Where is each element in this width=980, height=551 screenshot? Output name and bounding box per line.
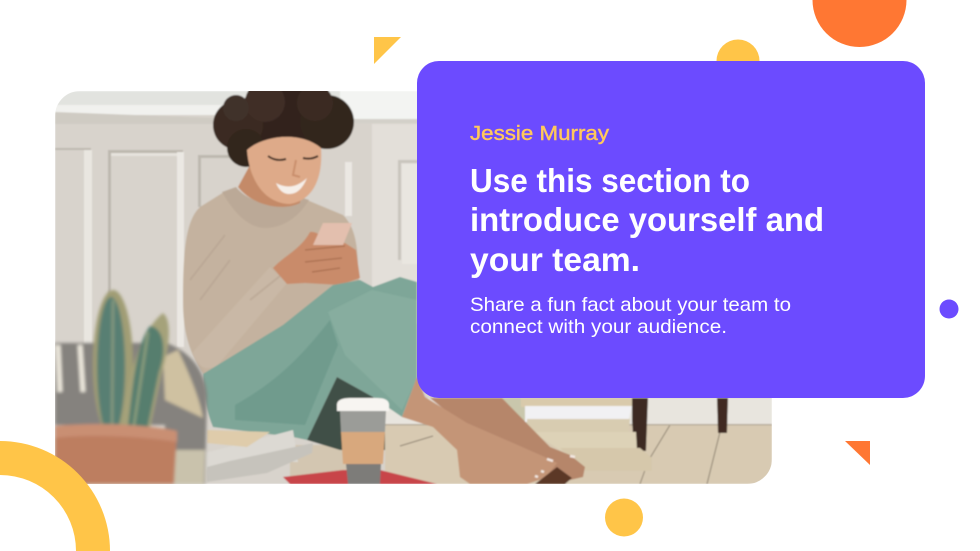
heading: your team. <box>470 241 640 278</box>
panel: purple intro card <box>417 61 925 398</box>
takeaway cup <box>340 411 386 432</box>
red notebook <box>283 470 437 484</box>
decoration: purple dot <box>940 300 958 318</box>
blurred foreground: blanket and cactus <box>55 290 207 484</box>
magazines <box>275 429 298 462</box>
body text: Share a fun fact about your team to <box>470 294 791 316</box>
body text: connect with your audience. <box>470 316 727 338</box>
cactus stems <box>97 297 125 437</box>
face <box>247 137 321 204</box>
phone and hands <box>273 232 360 285</box>
terracotta pot <box>55 434 178 484</box>
wall between legs and books <box>502 398 528 424</box>
heading <box>470 162 824 278</box>
decoration: yellow triangle <box>374 37 401 64</box>
heading: Use this section to <box>470 162 750 199</box>
body text <box>470 294 791 338</box>
heading: introduce yourself and <box>470 201 824 238</box>
decoration: yellow circle behind panel <box>716 40 760 82</box>
wall <box>55 91 772 484</box>
name: Jessie Murray <box>470 122 610 145</box>
green trousers <box>203 277 417 440</box>
yellow arc bottom left <box>0 441 110 551</box>
neck <box>238 165 305 207</box>
chair legs <box>632 398 648 451</box>
wall panels <box>84 150 92 345</box>
stacked books <box>521 398 632 407</box>
photo: woman sitting on floor with phone <box>55 78 772 484</box>
legs and feet <box>430 398 585 482</box>
decoration: orange triangle <box>845 441 870 465</box>
sweater <box>183 192 360 374</box>
baseboard and floor <box>385 398 772 425</box>
decoration: orange circle top right <box>812 0 906 47</box>
hair <box>212 91 355 168</box>
decoration: yellow circle bottom <box>605 498 643 536</box>
